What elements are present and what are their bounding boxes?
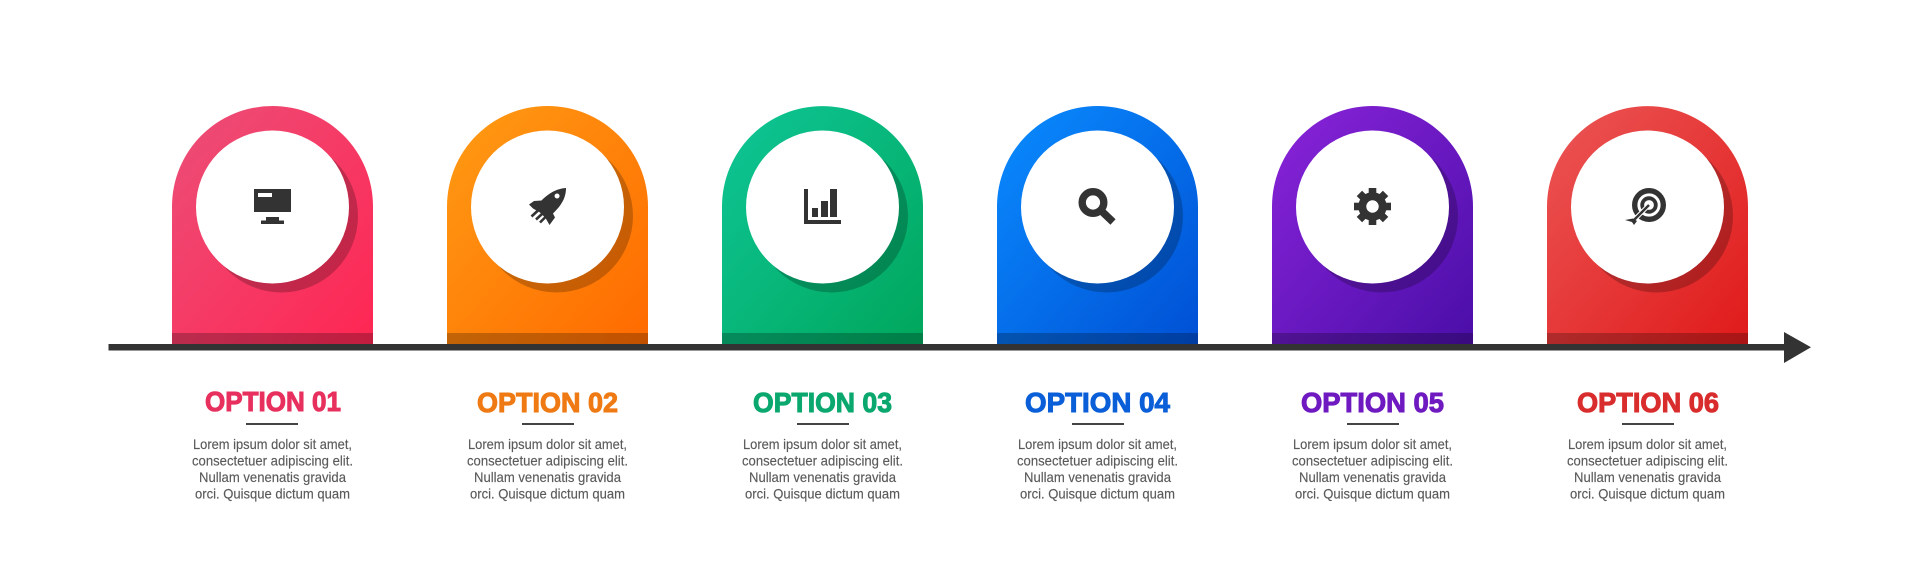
- text block 01: orci. Quisque dictum quam: [195, 486, 350, 502]
- arch card 02: [447, 106, 648, 344]
- icon: gear: [1354, 188, 1391, 225]
- text block 04: [1017, 436, 1178, 502]
- panel: option 01: [172, 106, 373, 502]
- text block 04: Nullam venenatis gravida: [1024, 469, 1171, 485]
- text block 02: consectetuer adipiscing elit.: [467, 452, 628, 468]
- text block 06: consectetuer adipiscing elit.: [1567, 452, 1728, 468]
- heading: option 03: OPTION 03: [753, 387, 892, 418]
- underline 05: [1347, 423, 1399, 425]
- panel: option 02: [447, 106, 648, 502]
- text block 06: [1567, 436, 1728, 502]
- underline 06: [1622, 423, 1674, 425]
- text block 03: Nullam venenatis gravida: [749, 469, 896, 485]
- heading: option 04: OPTION 04: [1025, 387, 1171, 418]
- heading: option 05: OPTION 05: [1301, 387, 1444, 418]
- circle shadow 04: [1030, 140, 1183, 292]
- white circle 04: [1021, 130, 1174, 284]
- icon: magnifier: [1082, 192, 1113, 222]
- icon: monitor: [254, 189, 291, 224]
- arch card 04: [997, 106, 1198, 344]
- text block 05: Lorem ipsum dolor sit amet,: [1293, 436, 1452, 452]
- underline 03: [797, 423, 849, 425]
- text block 05: [1292, 436, 1453, 502]
- text block 04: Lorem ipsum dolor sit amet,: [1018, 436, 1177, 452]
- icon: bar chart: [804, 189, 841, 224]
- arch card 05: [1272, 106, 1473, 344]
- text block 03: consectetuer adipiscing elit.: [742, 452, 903, 468]
- text block 01: consectetuer adipiscing elit.: [192, 452, 353, 468]
- heading: option 06: OPTION 06: [1577, 387, 1719, 418]
- text block 01: [192, 436, 353, 502]
- text block 06: Nullam venenatis gravida: [1574, 469, 1721, 485]
- circle shadow 02: [480, 140, 633, 292]
- text block 05: Nullam venenatis gravida: [1299, 469, 1446, 485]
- white circle 05: [1296, 130, 1449, 284]
- text block 05: consectetuer adipiscing elit.: [1292, 452, 1453, 468]
- base band 01: [172, 333, 373, 344]
- underline 02: [522, 423, 574, 425]
- heading: option 01: OPTION 01: [205, 386, 341, 417]
- base band 03: [722, 333, 923, 344]
- panel: option 05: [1272, 106, 1473, 502]
- icon: target with arrow: [1625, 191, 1663, 225]
- heading: option 02: OPTION 02: [477, 387, 618, 418]
- base band 06: [1547, 333, 1748, 344]
- text block 03: [742, 436, 903, 502]
- arch card 03: [722, 106, 923, 344]
- circle shadow 05: [1305, 140, 1458, 292]
- circle shadow 06: [1580, 140, 1733, 292]
- text block 02: Lorem ipsum dolor sit amet,: [468, 436, 627, 452]
- base band 02: [447, 333, 648, 344]
- arrow: timeline: [108, 332, 1811, 363]
- text block 03: orci. Quisque dictum quam: [745, 486, 900, 502]
- white circle 01: [196, 130, 349, 284]
- base band 04: [997, 333, 1198, 344]
- text block 02: Nullam venenatis gravida: [474, 469, 621, 485]
- text block 04: consectetuer adipiscing elit.: [1017, 452, 1178, 468]
- text block 04: orci. Quisque dictum quam: [1020, 486, 1175, 502]
- white circle 02: [471, 130, 624, 284]
- text block 05: orci. Quisque dictum quam: [1295, 486, 1450, 502]
- text block 06: Lorem ipsum dolor sit amet,: [1568, 436, 1727, 452]
- base band 05: [1272, 333, 1473, 344]
- white circle 03: [746, 130, 899, 284]
- circle shadow 03: [755, 140, 908, 292]
- underline 01: [246, 423, 298, 425]
- text block 02: [467, 436, 628, 502]
- text block 03: Lorem ipsum dolor sit amet,: [743, 436, 902, 452]
- underline 04: [1072, 423, 1124, 425]
- text block 06: orci. Quisque dictum quam: [1570, 486, 1725, 502]
- white circle 06: [1571, 130, 1724, 284]
- text block 01: Nullam venenatis gravida: [199, 469, 346, 485]
- icon: rocket: [529, 188, 566, 225]
- arch card 06: [1547, 106, 1748, 344]
- text block 01: Lorem ipsum dolor sit amet,: [193, 436, 352, 452]
- panel: option 04: [997, 106, 1198, 502]
- arch card 01: [172, 106, 373, 344]
- circle shadow 01: [205, 140, 358, 292]
- panel: option 06: [1547, 106, 1748, 502]
- text block 02: orci. Quisque dictum quam: [470, 486, 625, 502]
- panel: option 03: [722, 106, 923, 501]
